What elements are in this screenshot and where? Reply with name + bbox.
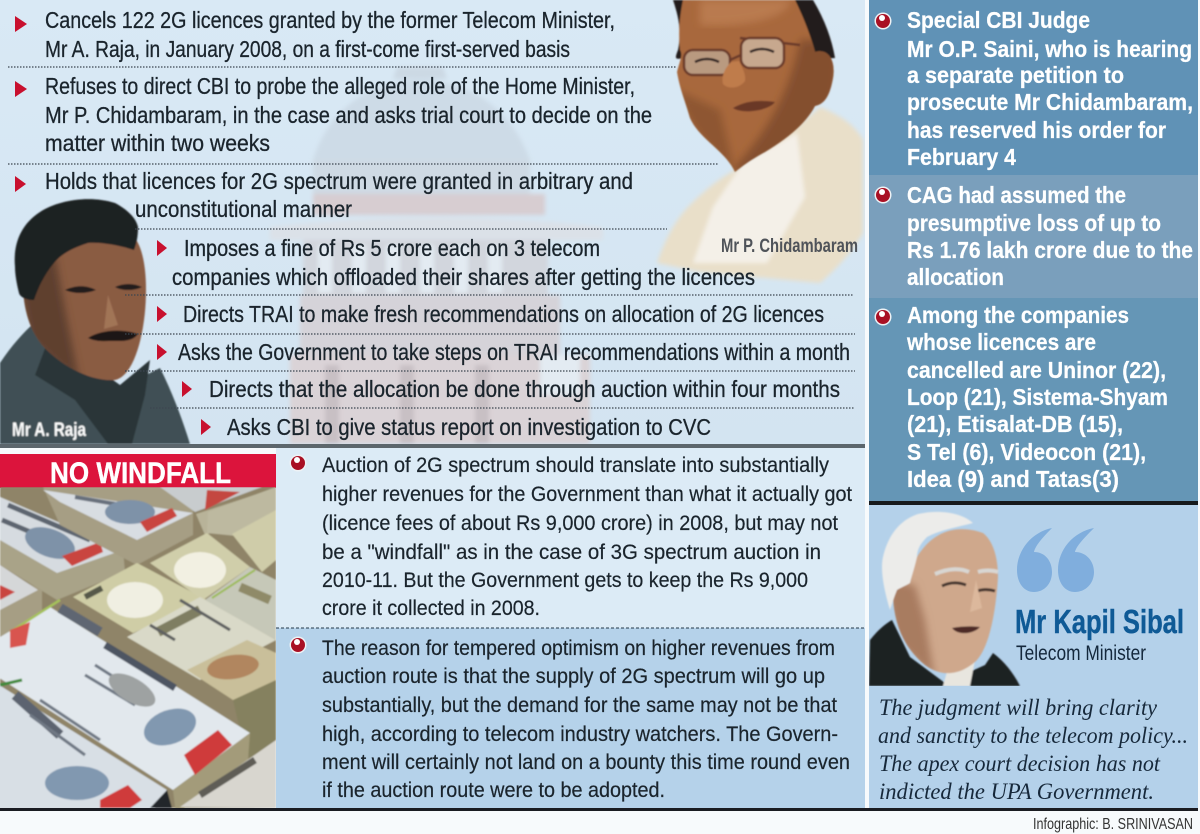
fact: CAG presumptive loss: allocation [907, 264, 1004, 290]
bullet: companies [874, 308, 892, 326]
speaker title: Telecom Minister [1016, 642, 1146, 665]
fact: CBI judge: February 4 [907, 144, 1016, 170]
fact: CBI judge: has reserved his order for [907, 117, 1166, 143]
No Windfall heading: NO WINDFALL [50, 457, 231, 490]
fact: cancelled companies: S Tel (6), Videocon (21), [907, 439, 1146, 465]
dashed divider [276, 627, 865, 629]
fact: CAG presumptive loss [907, 182, 1193, 290]
label: Mr P. Chidambaram: Mr P. Chidambaram [721, 236, 858, 257]
judgment text: Mr A. Raja, in January 2008, on a first-come first-served basis [45, 36, 570, 62]
Supreme Court building watermark [270, 67, 603, 444]
text: upper note: be a "windfall" as in the case of 3G spectrum auction in [322, 540, 821, 564]
panel: No Windfall header and photo [0, 454, 276, 815]
upper note background [276, 448, 865, 628]
fact: CBI judge: a separate petition to [907, 62, 1124, 88]
text: upper note: crore it collected in 2008. [322, 596, 540, 620]
text: lower note [322, 636, 850, 802]
bullet: CAG [874, 186, 892, 204]
fact: cancelled companies: Loop (21), Sistema-Shyam [907, 384, 1168, 410]
fact: cancelled companies: (21), Etisalat-DB (15), [907, 411, 1123, 437]
bullet: upper note [290, 454, 306, 472]
judgment text: companies which offloaded their shares after getting the licences [172, 264, 755, 290]
judgment text: Refuses to direct CBI to probe the alleged role of the Home Minister, [45, 73, 635, 99]
text: lower note: if the auction route were to be adopted. [322, 778, 665, 802]
fact: CBI judge [907, 7, 1193, 170]
fact: cancelled companies: cancelled are Uninor (22), [907, 357, 1166, 383]
judgment text: Mr P. Chidambaram, in the case and asks trial court to decide on the [45, 102, 652, 128]
band: CAG [869, 175, 1198, 298]
panel: Supreme Court judgment points [0, 0, 865, 445]
No Windfall heading [0, 454, 276, 490]
text: lower note: substantially, but the demand for the same may not be that [322, 693, 837, 717]
rule above quote panel [869, 501, 1198, 505]
bullet: CBI judge [874, 12, 892, 30]
icon: quotation marks [1017, 528, 1094, 592]
quote text: indicted the UPA Government. [879, 779, 1154, 804]
text: upper note: (licence fees of about Rs 9,000 crore) in 2008, but may not [322, 511, 838, 535]
lower note background [276, 628, 865, 808]
quote text: The apex court decision has not [879, 751, 1161, 776]
dotted separators [8, 67, 855, 408]
quote panel background [869, 505, 1198, 808]
fact: cancelled companies [906, 302, 1168, 492]
text: upper note: 2010-11. But the Government gets to keep the Rs 9,000 [322, 568, 808, 592]
judgment text: Directs TRAI to make fresh recommendations on allocation of 2G licences [183, 301, 824, 327]
fact: cancelled companies: Idea (9) and Tatas(3) [907, 466, 1119, 492]
judgment text: Directs that the allocation be done through auction within four months [209, 376, 840, 402]
photo: Mr Kapil Sibal [869, 512, 1020, 686]
band: CBI judge [869, 0, 1198, 175]
panel background [0, 0, 865, 445]
bullet arrows [15, 16, 211, 435]
judgment text: matter within two weeks [45, 130, 270, 156]
text: lower note: high, according to telecom industry watchers. The Govern- [322, 722, 838, 746]
panel: analysis of auction revenues [276, 448, 865, 808]
text: lower note: ment will certainly not land on a bounty this time round even [322, 750, 850, 774]
text: upper note: higher revenues for the Government than what it actually got [322, 482, 852, 506]
judgment text: Imposes a fine of Rs 5 crore each on 3 telecom [184, 235, 600, 261]
band: companies [869, 298, 1198, 501]
photo: stacks of rupee notes [0, 487, 276, 815]
fact: CAG presumptive loss: presumptive loss of up to [907, 210, 1161, 236]
text: upper note [322, 453, 852, 620]
horizontal rule under judgment panel [0, 444, 865, 448]
text: lower note: auction route is that the supply of 2G spectrum will go up [322, 664, 825, 688]
judgment text: unconstitutional manner [135, 196, 352, 222]
judgment text [45, 7, 850, 440]
judgment text: Asks the Government to take steps on TRAI recommendations within a month [178, 339, 850, 365]
quote text: and sanctity to the telecom policy... [878, 723, 1188, 748]
photo: Mr A. Raja [0, 199, 190, 444]
panel: background facts sidebar [869, 0, 1198, 501]
fact: cancelled companies: Among the companies [907, 302, 1129, 328]
fact: CBI judge: Special CBI Judge [907, 7, 1090, 33]
text: lower note: The reason for tempered optimism on higher revenues from [322, 636, 835, 660]
photo: Mr P. Chidambaram [657, 0, 863, 283]
quote text [878, 695, 1188, 804]
judgment text: Cancels 122 2G licences granted by the former Telecom Minister, [45, 7, 615, 33]
panel: Kapil Sibal quote [869, 505, 1198, 808]
label: Mr A. Raja: Mr A. Raja [12, 420, 86, 441]
bullet: lower note [290, 636, 306, 654]
judgment text: Asks CBI to give status report on investigation to CVC [227, 414, 711, 440]
fact: CAG presumptive loss: CAG had assumed the [907, 182, 1126, 208]
fact: cancelled companies: whose licences are [906, 329, 1096, 355]
judgment text: Holds that licences for 2G spectrum were granted in arbitrary and [45, 168, 633, 194]
bottom rule [0, 808, 1198, 811]
quote text: The judgment will bring clarity [879, 695, 1158, 720]
text: upper note: Auction of 2G spectrum should translate into substantially [322, 453, 829, 477]
